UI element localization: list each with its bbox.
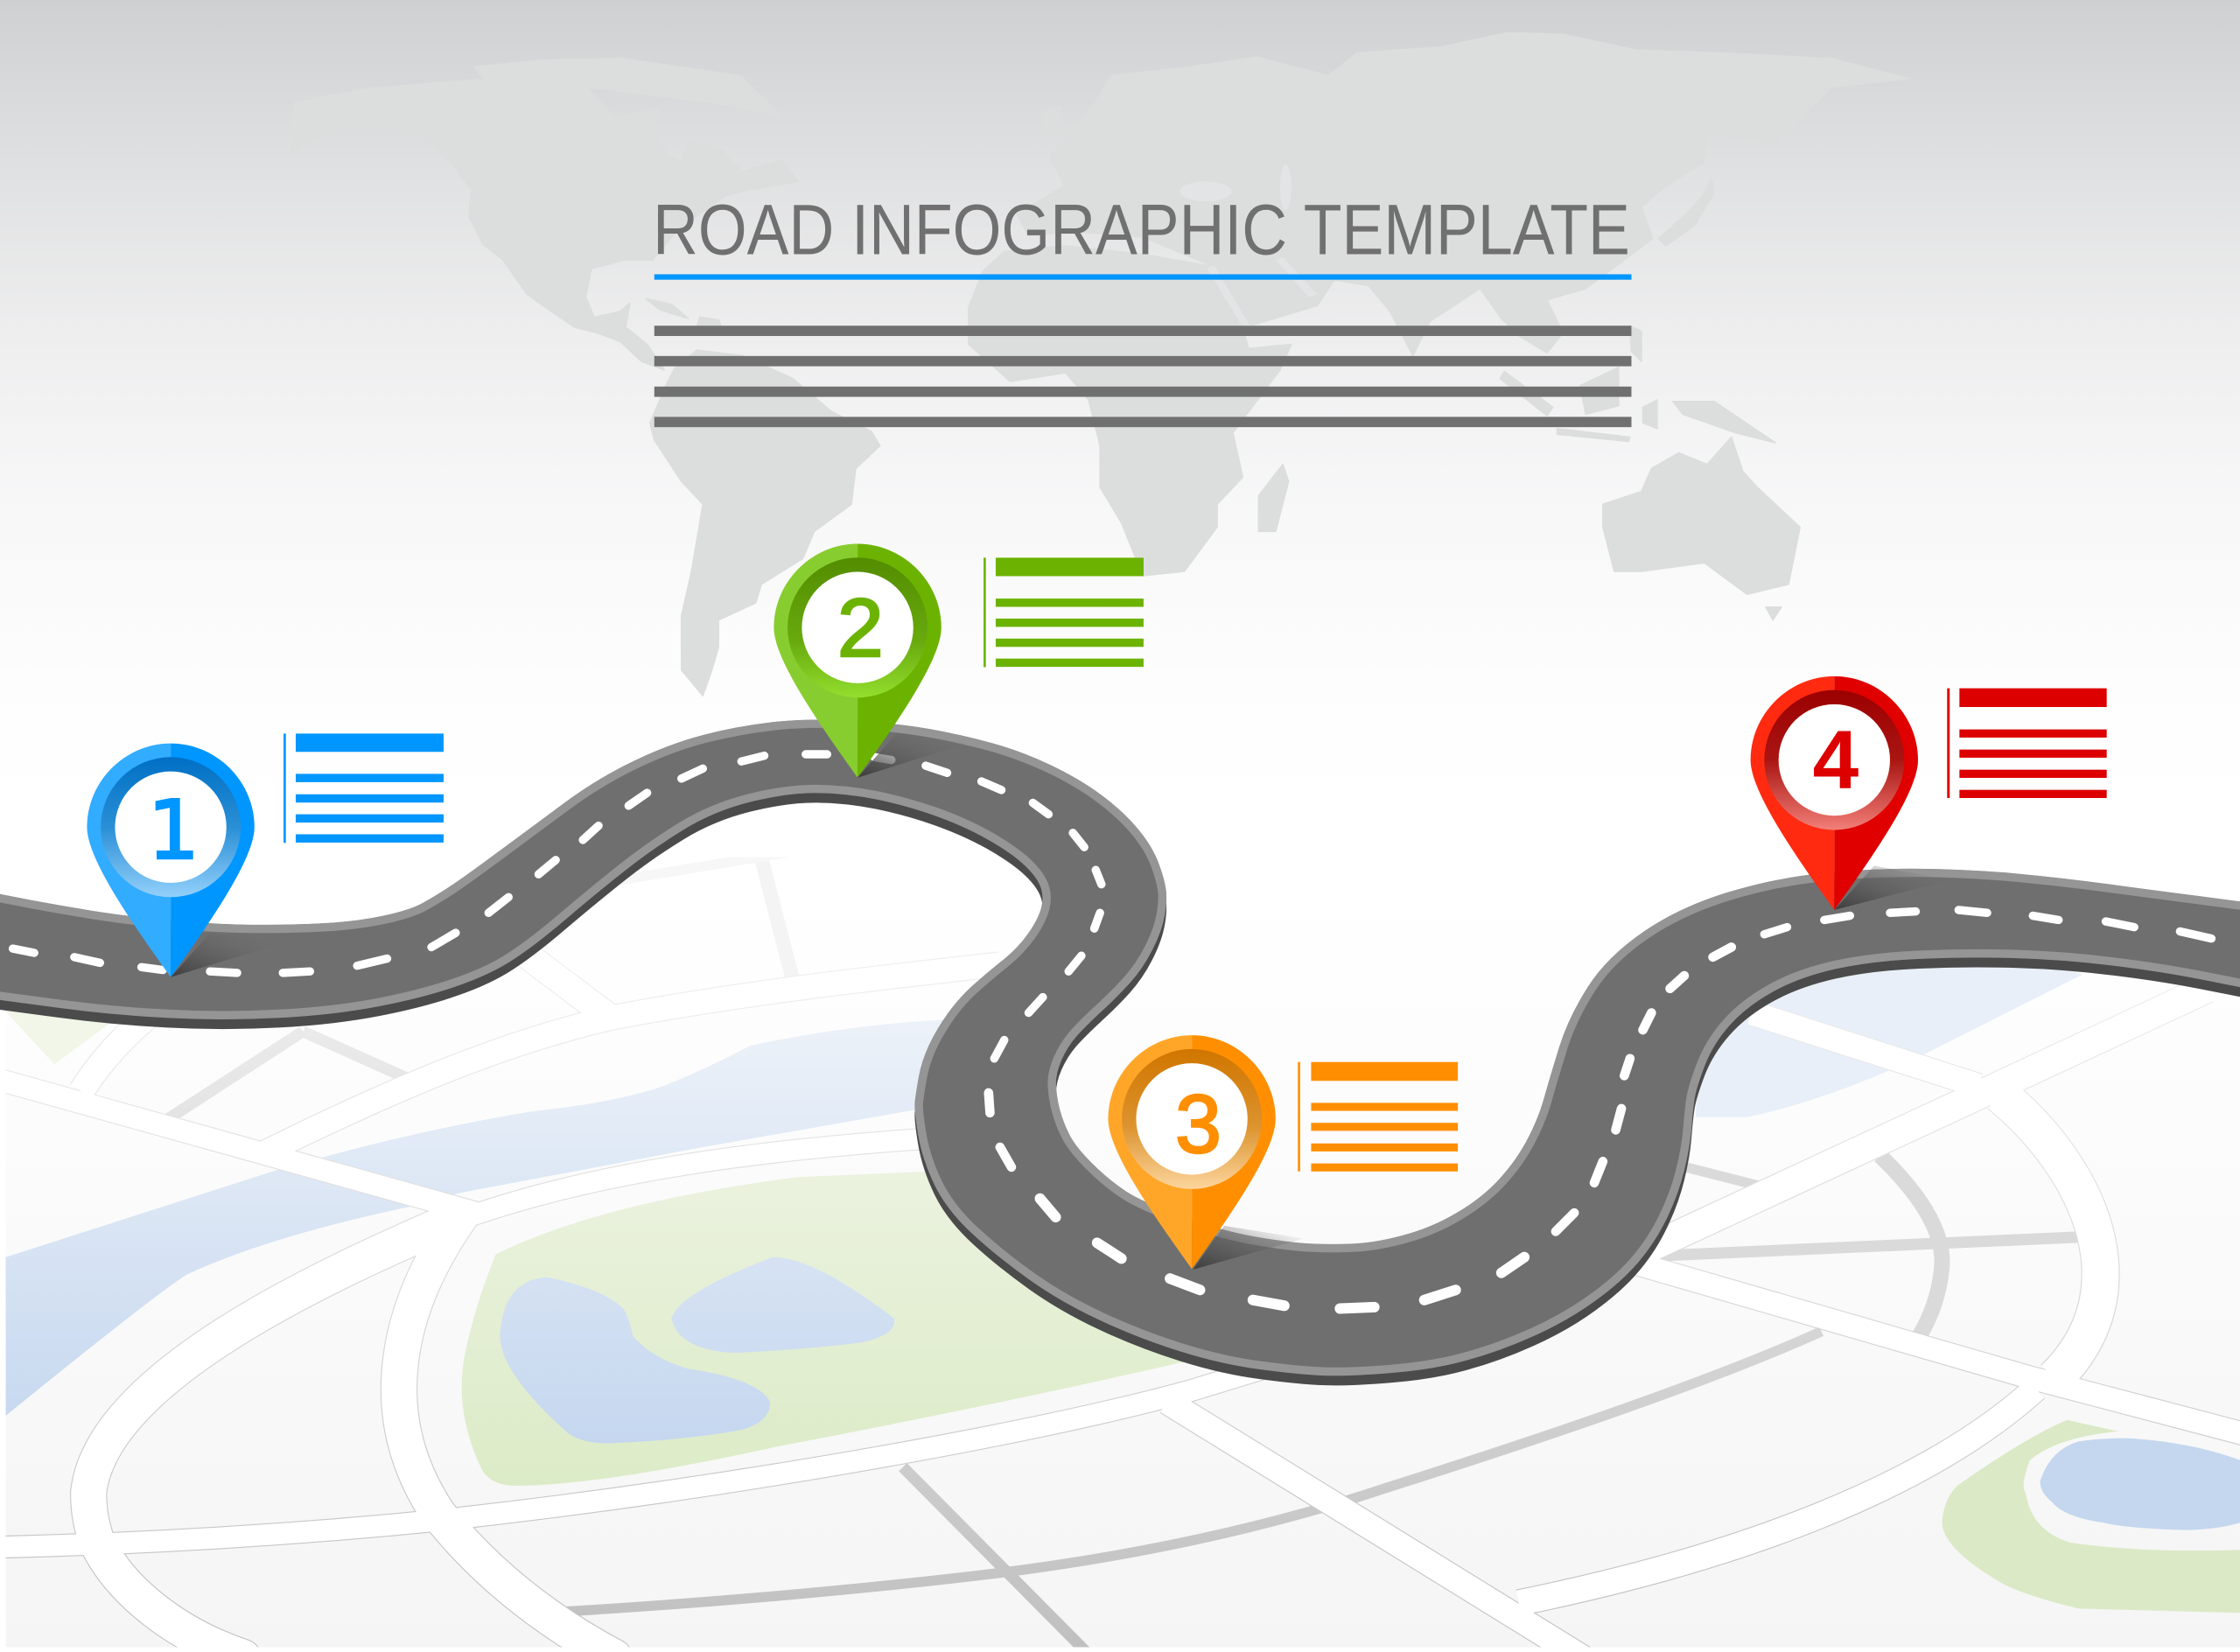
island: Madagascar (1258, 465, 1289, 531)
pin marker (1751, 676, 1918, 910)
title: ROAD INFOGRAPHIC TEMPLATE (653, 191, 1630, 270)
continent: North America (290, 80, 799, 370)
corner park (5, 1011, 108, 1064)
text block 1 (284, 733, 444, 843)
city map (0, 815, 2240, 1652)
road centre dashes (13, 754, 2211, 1309)
intro text placeholder bars (654, 326, 1631, 427)
lower right park (1942, 1420, 2240, 1613)
island: Britain (1043, 106, 1063, 137)
lower right lake (2040, 1438, 2240, 1530)
road side shadow (0, 730, 2240, 1385)
inland seas (1180, 164, 1317, 327)
number 1: 1 (148, 783, 200, 878)
world map (290, 33, 1908, 696)
islands: Indonesia and Philippines (1500, 326, 1657, 441)
river (6, 1017, 1000, 1416)
white street network (0, 955, 2240, 1652)
continent: Australia (1603, 438, 1800, 594)
pin shadow (171, 933, 283, 977)
pin shadow (1193, 1226, 1305, 1270)
number 2: 2 (837, 582, 884, 675)
continent: Africa (969, 246, 1292, 576)
continent: Arctic islands (474, 59, 781, 116)
lake right (671, 1257, 894, 1353)
pin shadow (1834, 865, 1950, 910)
text block 4 (1947, 689, 2107, 798)
central park (462, 1172, 1228, 1486)
pin 3 with shadow (1108, 1035, 1305, 1270)
road surface with light edge (0, 719, 2240, 1376)
island: New Guinea (1673, 402, 1775, 443)
continent: South America (650, 350, 880, 696)
number 4: 4 (1813, 714, 1859, 807)
title underline (654, 274, 1631, 280)
islands: Japan (1659, 178, 1714, 246)
map ground (5, 1497, 2240, 1647)
pin 2 with shadow (774, 544, 969, 778)
text block 2 (984, 557, 1144, 667)
pin 4 with shadow (1751, 676, 1950, 910)
street surfaces (0, 955, 2240, 1652)
pin marker (774, 544, 942, 778)
lake left (500, 1278, 770, 1443)
island: Tasmania (1766, 607, 1782, 620)
pin 1 with shadow (87, 744, 283, 977)
street casings (0, 955, 2240, 1652)
road (0, 719, 2240, 1385)
number 3: 3 (1175, 1078, 1222, 1171)
pin marker (87, 744, 255, 977)
pin marker (1108, 1035, 1276, 1269)
text block 3 (1298, 1062, 1458, 1172)
minor side streets (169, 815, 2077, 1652)
island: Caribbean (646, 298, 721, 327)
right river (1696, 968, 2082, 1117)
background gradient (0, 0, 2240, 800)
continent: Eurasia (1017, 33, 1908, 356)
pin shadow (858, 733, 969, 778)
